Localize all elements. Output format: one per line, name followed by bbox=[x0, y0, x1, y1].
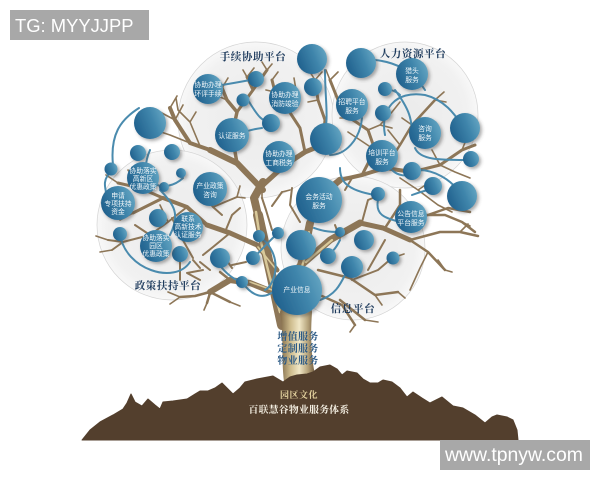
circle: 工商税务: 协助办理 bbox=[265, 149, 293, 158]
watermark: top-left: TG: MYYJJPP bbox=[15, 15, 134, 36]
circle: 认证服务: 认证服务 bbox=[218, 131, 246, 140]
circle: 会务活动服务: 会务活动 bbox=[305, 192, 333, 201]
circle: 园区优惠政策: 优惠政策 bbox=[142, 249, 170, 258]
circle: 工商税务: 工商税务 bbox=[265, 158, 293, 167]
circle: 咨询服务: 咨询 bbox=[418, 124, 432, 133]
circle: 产业信息 bbox=[272, 265, 322, 315]
trunk service labels: 物业服务 bbox=[277, 354, 319, 367]
blue connector lines bbox=[105, 60, 465, 300]
circle: 工商税务 bbox=[263, 141, 295, 173]
circle: 会务活动服务 bbox=[296, 177, 342, 223]
circle: 产业信息: 产业信息 bbox=[283, 285, 311, 294]
circle: 联系高新技术认证服务 bbox=[173, 212, 203, 242]
ground title: 百联慧谷物业服务体系 bbox=[249, 403, 349, 416]
circle: 公告信息平台服务: 平台服务 bbox=[397, 218, 425, 227]
circle: 招聘平台服务 bbox=[336, 89, 368, 121]
circle: 环评手续 bbox=[193, 74, 223, 104]
trunk service labels: 增值服务 bbox=[277, 330, 319, 343]
circle: 消防竣工: 消防竣验 bbox=[271, 99, 299, 108]
heading: 人力资源平台: 人力资源平台 bbox=[380, 47, 446, 60]
watermark: bottom-right bbox=[440, 440, 590, 470]
tree branches bbox=[96, 62, 478, 332]
circle: 招聘平台服务: 服务 bbox=[345, 106, 359, 115]
ground mound bbox=[82, 365, 518, 440]
circle: 环评手续: 协助办理 bbox=[194, 80, 222, 89]
circle: 联系高新技术认证服务: 高新技术 bbox=[174, 222, 202, 231]
circle: 产业政策咨询: 咨询 bbox=[203, 190, 217, 199]
circle: 联系高新技术认证服务: 联系 bbox=[181, 214, 195, 223]
circle: 高新区优惠政策: 优惠政策 bbox=[129, 182, 157, 191]
heading: 信息平台: 信息平台 bbox=[331, 302, 375, 315]
circle: 环评手续: 环评手续 bbox=[194, 89, 222, 98]
heading: 手续协助平台: 手续协助平台 bbox=[220, 50, 286, 63]
circle: 园区优惠政策 bbox=[140, 230, 172, 262]
circle: 咨询服务: 服务 bbox=[418, 133, 432, 142]
circle: 高新区优惠政策: 协助落实 bbox=[129, 166, 157, 175]
platform discs bbox=[97, 42, 478, 320]
circle: 产业政策咨询 bbox=[193, 172, 227, 206]
trunk bbox=[280, 298, 315, 385]
circle: 培训平台服务: 培训平台 bbox=[368, 148, 396, 157]
trunk service labels bbox=[277, 330, 319, 367]
circle: 猎头服务: 猎头 bbox=[405, 66, 419, 75]
circle: 猎头服务 bbox=[396, 58, 428, 90]
ground text: 园区文化: 园区文化 bbox=[280, 389, 318, 400]
watermark: bottom-right: www.tpnyw.com bbox=[444, 444, 583, 466]
circle: 消防竣工: 协助办理 bbox=[271, 90, 299, 99]
circle: 招聘平台服务: 招聘平台 bbox=[338, 97, 366, 106]
circle: 申请专项扶持资金 bbox=[101, 186, 135, 220]
circle: 咨询服务 bbox=[409, 117, 441, 149]
circle: 申请专项扶持资金: 专项扶持 bbox=[104, 199, 132, 208]
circle: 培训平台服务: 服务 bbox=[375, 157, 389, 166]
service circles bbox=[104, 44, 480, 288]
circle: 培训平台服务 bbox=[366, 140, 398, 172]
circle: 产业政策咨询: 产业政策 bbox=[196, 181, 224, 190]
circle: 园区优惠政策: 园区 bbox=[149, 242, 163, 250]
circle: 猎头服务: 服务 bbox=[405, 75, 419, 84]
circle: 联系高新技术认证服务: 认证服务 bbox=[174, 230, 202, 239]
circle: 申请专项扶持资金: 资金 bbox=[111, 207, 125, 216]
circle: 申请专项扶持资金: 申请 bbox=[111, 191, 125, 200]
circle: 消防竣工 bbox=[269, 82, 301, 114]
circle: 高新区优惠政策 bbox=[127, 162, 159, 194]
heading: 政策扶持平台: 政策扶持平台 bbox=[135, 279, 201, 292]
circle: 公告信息平台服务: 公告信息 bbox=[397, 209, 425, 218]
circle: 园区优惠政策: 协助落实 bbox=[142, 233, 170, 242]
circle: 高新区优惠政策: 高新区 bbox=[133, 174, 153, 183]
watermark: top-left bbox=[10, 10, 149, 40]
circle: 公告信息平台服务 bbox=[395, 201, 427, 233]
trunk service labels: 定制服务 bbox=[277, 342, 319, 355]
circle: 认证服务 bbox=[215, 118, 249, 152]
circle: 会务活动服务: 服务 bbox=[312, 201, 326, 210]
